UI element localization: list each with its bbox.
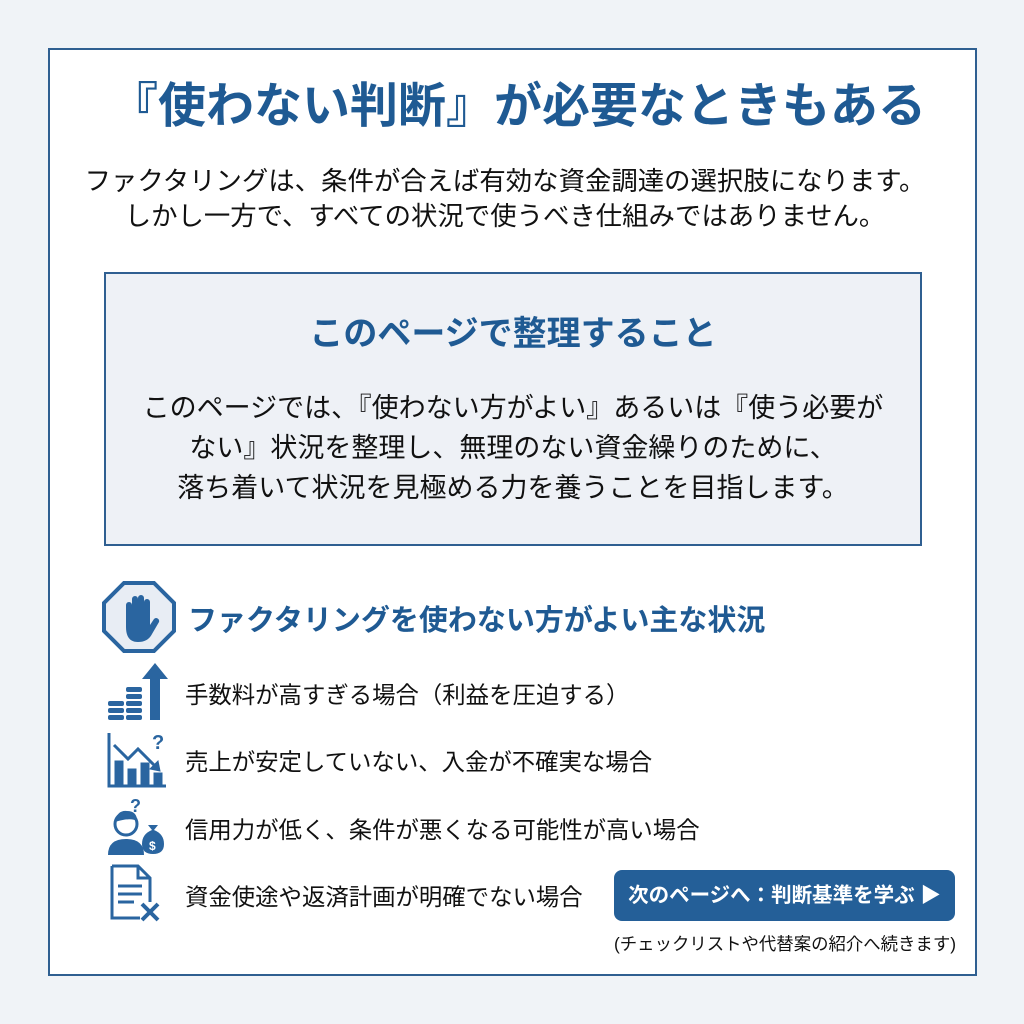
summary text: 落ち着いて状況を見極める力を養うことを目指します。 xyxy=(177,473,849,503)
section heading: ファクタリングを使わない方がよい主な状況 xyxy=(188,605,765,637)
item 2: 売上が安定していない、入金が不確実な場合 xyxy=(185,749,652,775)
button: next page: 次のページへ：判断基準を学ぶ ▶ xyxy=(628,884,941,907)
button: next page xyxy=(614,870,955,921)
note: (チェックリストや代替案の紹介へ続きます) xyxy=(614,934,956,954)
summary heading: このページで整理すること xyxy=(309,315,717,353)
icon: document with x xyxy=(110,864,160,922)
icon: stop hand xyxy=(102,581,176,653)
icon: person with money bag xyxy=(108,798,164,855)
summary text: このページでは、『使わない方がよい』あるいは『使う必要が xyxy=(143,393,883,423)
summary text xyxy=(143,393,883,503)
intro text: しかし一方で、すべての状況で使うべき仕組みではありません。 xyxy=(125,201,885,231)
panel: this page summary xyxy=(104,272,922,546)
icon: falling chart: ? xyxy=(152,732,164,754)
intro text: ファクタリングは、条件が合えば有効な資金調達の選択肢になります。 xyxy=(85,166,925,196)
summary text: ない』状況を整理し、無理のない資金繰りのために、 xyxy=(189,433,837,463)
item 1: 手数料が高すぎる場合（利益を圧迫する） xyxy=(185,682,629,708)
title: 『使わない判断』が必要なときもある xyxy=(110,80,926,133)
icon: person with money bag: $ xyxy=(149,839,156,853)
icon: coins and arrow xyxy=(108,663,168,720)
item 3: 信用力が低く、条件が悪くなる可能性が高い場合 xyxy=(185,817,700,843)
intro text xyxy=(85,166,925,231)
icon: falling chart xyxy=(108,732,166,788)
item 4: 資金使途や返済計画が明確でない場合 xyxy=(185,884,583,910)
